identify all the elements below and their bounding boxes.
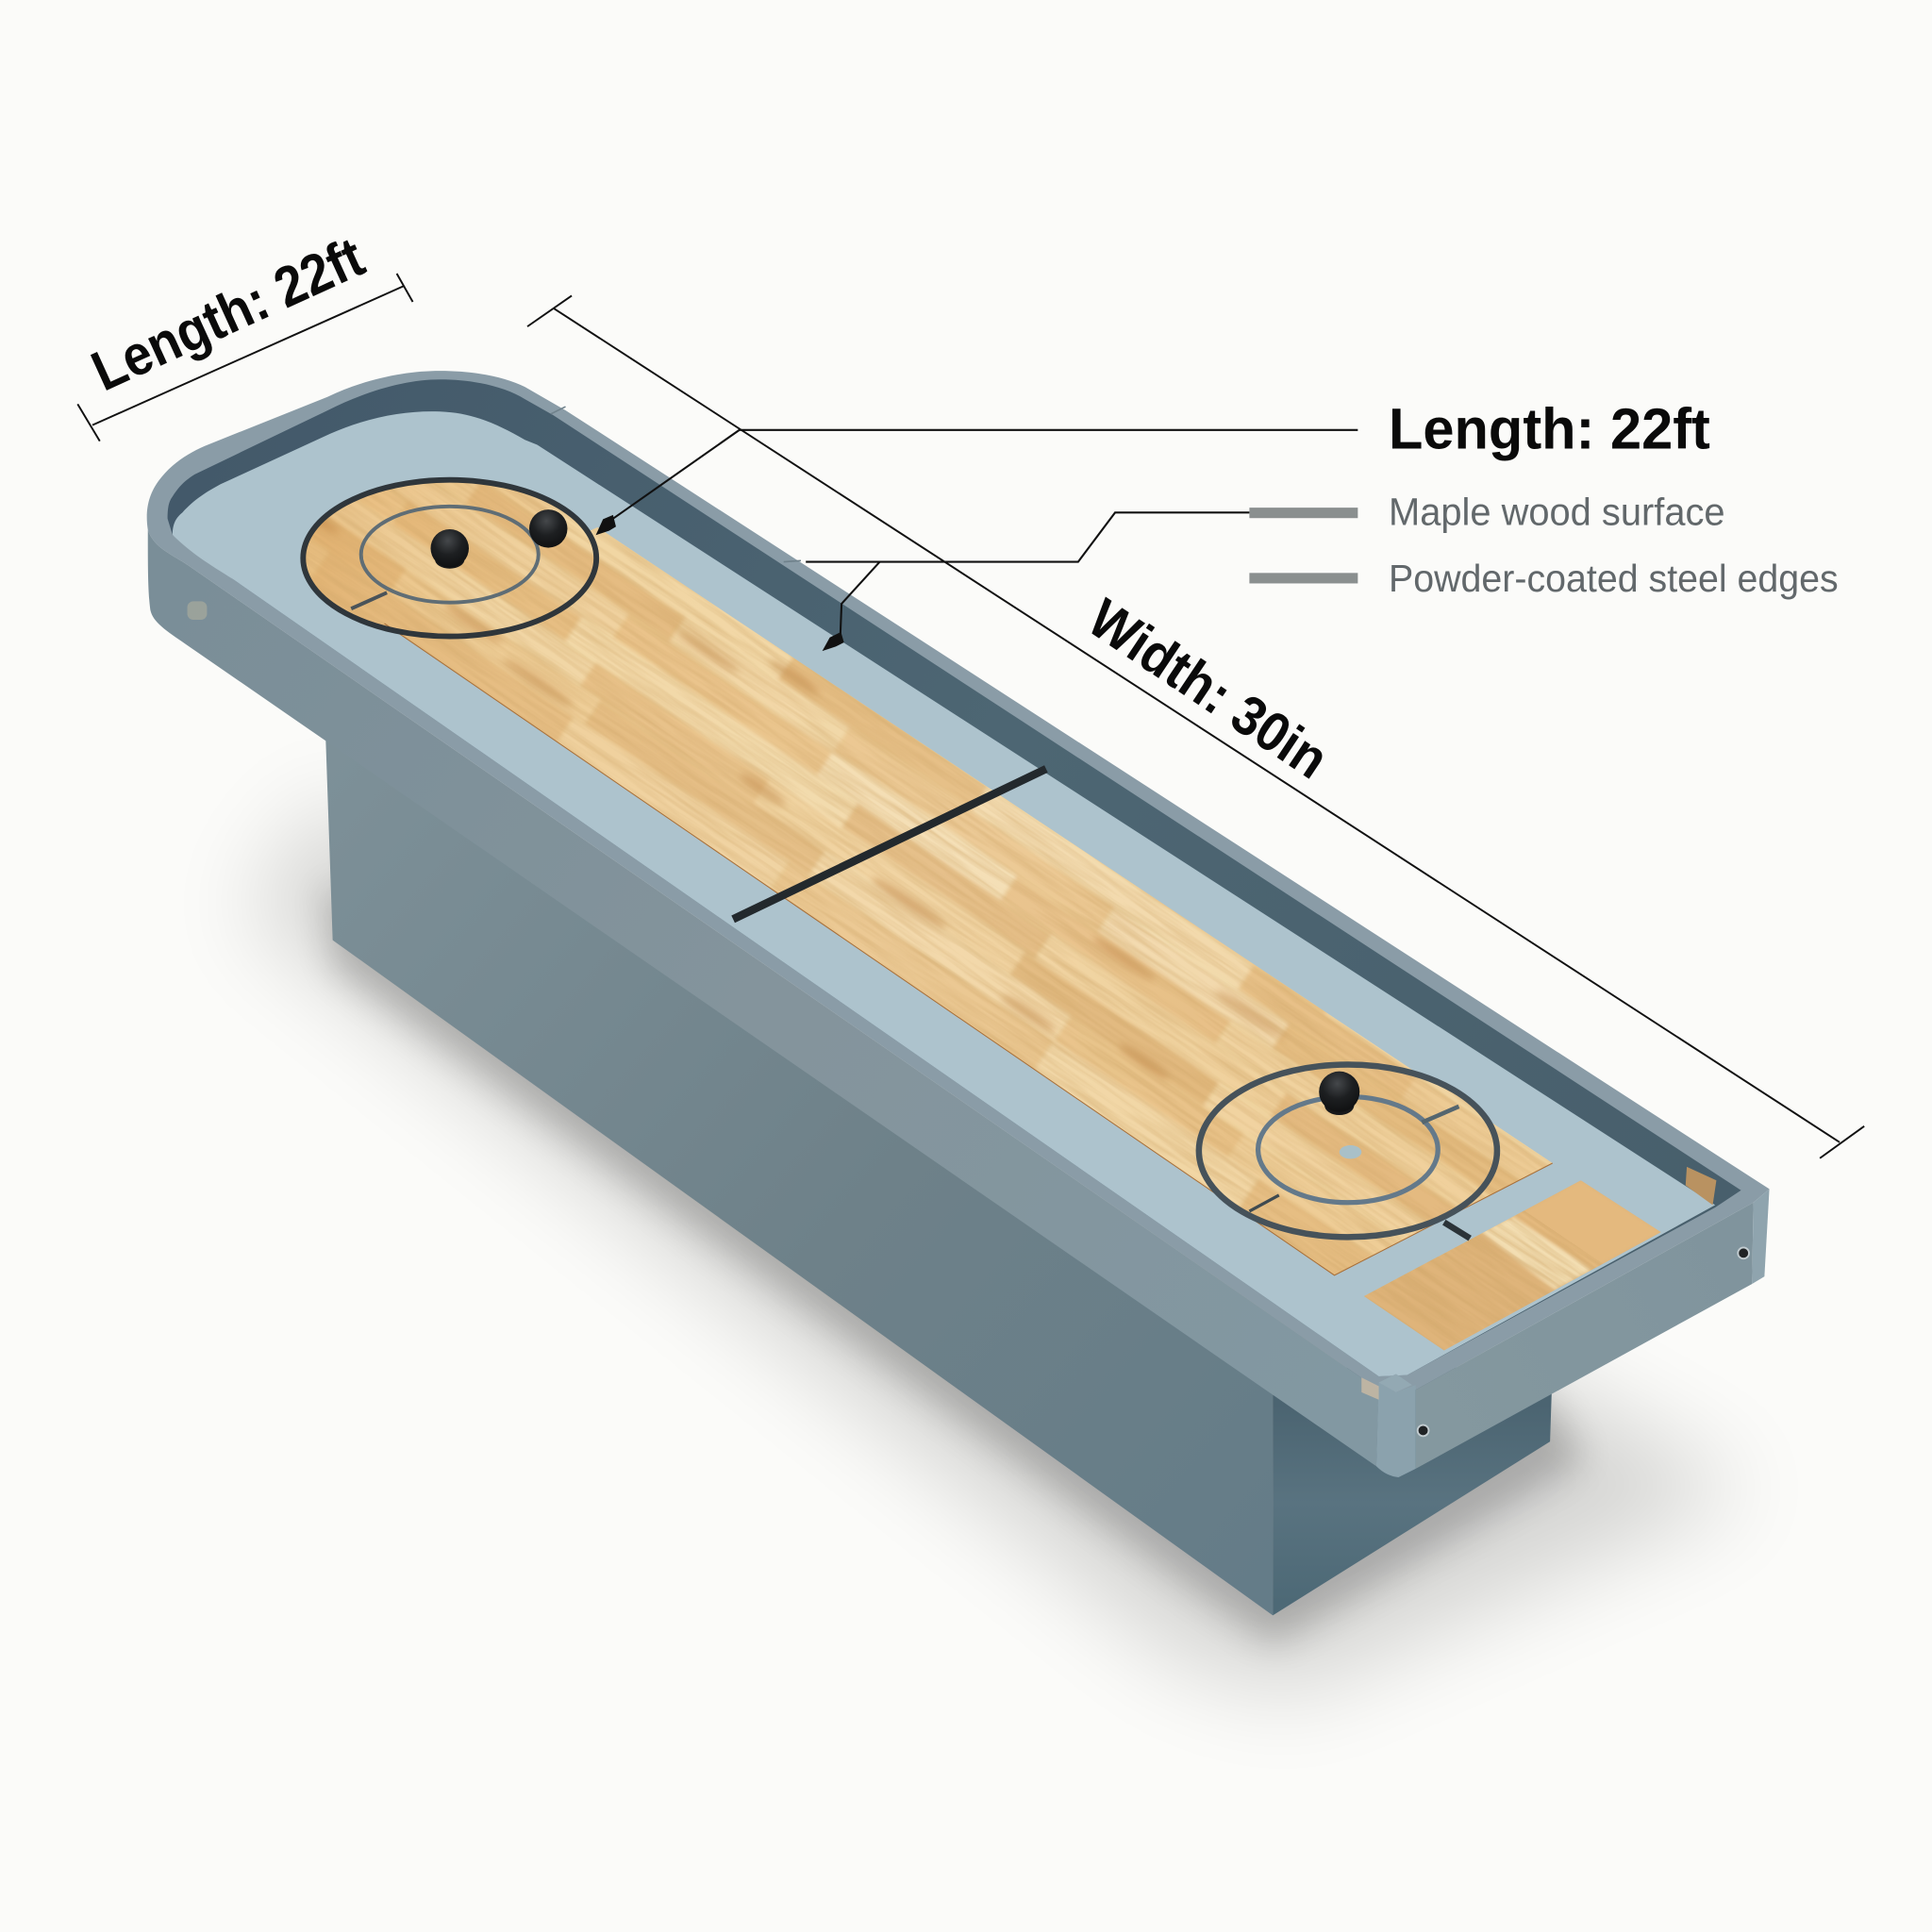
rim front face: [148, 530, 1379, 1466]
wood strip edge: [385, 624, 1553, 1275]
dimension: length: [77, 274, 413, 441]
shuffleboard infographic: [77, 240, 1865, 1717]
corner marks and screws: [188, 407, 1749, 1436]
legend text: maple: Maple wood surface: [1389, 490, 1725, 533]
near corner piece: [1376, 1374, 1416, 1477]
pedestal base: [325, 727, 1553, 1615]
legend swatch: maple: [1249, 508, 1357, 518]
dimension: width: [527, 295, 1864, 1158]
table: [147, 371, 1770, 1615]
far scoring circle: [303, 480, 596, 637]
rim end face: [1416, 1203, 1754, 1469]
heading: length: Length: 22ft: [1389, 396, 1710, 461]
near scoring circle: [1199, 1064, 1497, 1239]
pucks: [430, 509, 1359, 1115]
legend swatch: steel: [1249, 573, 1357, 583]
floor shadow: [246, 801, 1750, 1694]
legend text: steel: Powder-coated steel edges: [1389, 557, 1839, 600]
leader: material callout: [806, 512, 1249, 649]
far corner piece: [1752, 1189, 1770, 1284]
center divider line: [733, 769, 1046, 919]
felt playing area: [173, 411, 1715, 1376]
dimension label: width: Width: 30in: [1077, 588, 1339, 791]
leader: length callout: [597, 430, 1357, 534]
maple wood end section: [1364, 1180, 1660, 1351]
rim top surface: [147, 371, 1770, 1395]
inner rim wall: [168, 379, 1741, 1376]
maple wood main surface: [306, 483, 1553, 1275]
wood end tab: [1686, 1167, 1716, 1205]
dimension label: length: Length: 22ft: [82, 225, 374, 403]
